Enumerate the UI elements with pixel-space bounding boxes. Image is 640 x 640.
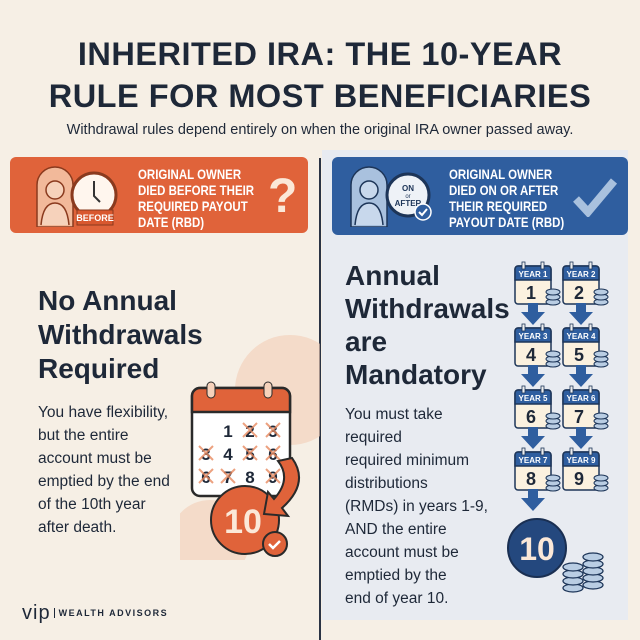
header text: ORIGINAL OWNER (449, 166, 552, 182)
illustration: calendar with 10: 7 (223, 468, 233, 487)
header text: PAYOUT DATE (RBD) (449, 214, 564, 230)
left body: account must be (38, 450, 152, 467)
illustration: yearly calendars: 10 (519, 531, 555, 567)
right body (345, 406, 488, 607)
illustration: yearly calendars: 7 (574, 407, 584, 427)
illustration: yearly calendars: YEAR 5 (519, 394, 548, 403)
illustration: yearly calendars: 5 (574, 345, 584, 365)
icon: person and clock (350, 166, 432, 227)
illustration: yearly calendars: YEAR 4 (567, 332, 596, 341)
illustration: yearly calendars: 6 (526, 407, 536, 427)
left heading: Required (38, 353, 159, 384)
title (49, 36, 591, 114)
icon: person and clock (36, 166, 118, 227)
right heading: are (345, 326, 387, 357)
right heading: Withdrawals (345, 293, 510, 324)
illustration: yearly calendars: YEAR 3 (519, 332, 548, 341)
illustration: calendar with 10: 4 (223, 445, 233, 464)
left body: after death. (38, 519, 116, 536)
illustration: calendar with 10 (180, 335, 320, 560)
illustration: yearly calendars: 1 (526, 283, 536, 303)
left heading: Withdrawals (38, 319, 203, 350)
footer logo: vip WEALTH ADVISORS (22, 602, 168, 624)
right body: AND the entire (345, 521, 447, 538)
left body: You have flexibility, (38, 404, 168, 421)
illustration: yearly calendars: YEAR 9 (567, 456, 596, 465)
illustration: calendar with 10: 6 (201, 468, 211, 487)
header text: DIED BEFORE THEIR (138, 182, 254, 198)
header text: REQUIRED PAYOUT (138, 198, 248, 214)
right body: (RMDs) in years 1-9, (345, 498, 488, 515)
right heading: Mandatory (345, 359, 487, 390)
illustration: yearly calendars: 4 (526, 345, 536, 365)
left heading: No Annual (38, 285, 177, 316)
illustration: yearly calendars: 8 (526, 469, 536, 489)
illustration: calendar with 10: 8 (245, 468, 255, 487)
header text (449, 166, 564, 230)
header text: DATE (RBD) (138, 214, 204, 230)
icon: person and clock: ON (402, 184, 414, 193)
right body: account must be (345, 544, 459, 561)
illustration: yearly calendars: YEAR 7 (519, 456, 548, 465)
illustration: yearly calendars (507, 262, 608, 593)
right body: distributions (345, 475, 428, 492)
illustration: calendar with 10: 1 (223, 422, 233, 441)
right heading: Annual (345, 260, 440, 291)
illustration: calendar with 10: 10 (224, 503, 262, 541)
header text (138, 166, 254, 230)
title: INHERITED IRA: THE 10-YEAR (78, 36, 562, 72)
left heading (38, 285, 203, 384)
right body: emptied by the (345, 567, 447, 584)
illustration: calendar with 10: 6 (268, 445, 278, 464)
illustration: calendar with 10: 3 (268, 422, 278, 441)
illustration: calendar with 10: 3 (201, 445, 211, 464)
icon: person and clock: AFTER (395, 199, 422, 208)
icon: person and clock: BEFORE (76, 213, 114, 223)
title: RULE FOR MOST BENEFICIARIES (49, 78, 591, 114)
illustration: yearly calendars: YEAR 1 (519, 270, 548, 279)
left body (38, 404, 170, 536)
header text: DIED ON OR AFTER (449, 182, 558, 198)
right body: You must take (345, 406, 443, 423)
left body: emptied by the end (38, 473, 170, 490)
right body: end of year 10. (345, 590, 448, 607)
icon: check mark (573, 178, 617, 217)
right panel background (322, 150, 628, 620)
subtitle: Withdrawal rules depend entirely on when the original IRA owner passed away. (67, 122, 573, 138)
header text: ORIGINAL OWNER (138, 166, 241, 182)
illustration: calendar with 10: 2 (245, 422, 255, 441)
illustration: yearly calendars: YEAR 2 (567, 270, 596, 279)
right heading (345, 260, 510, 390)
panel header: before RBD (10, 157, 308, 233)
icon: question mark: ? (268, 170, 297, 223)
illustration: yearly calendars: YEAR 6 (567, 394, 596, 403)
header text: THEIR REQUIRED (449, 198, 547, 214)
right body: required (345, 429, 402, 446)
right body: required minimum (345, 452, 469, 469)
panel header: on or after RBD (332, 157, 628, 235)
icon: person and clock: or (405, 194, 411, 200)
illustration: yearly calendars: 9 (574, 469, 584, 489)
left body: but the entire (38, 427, 128, 444)
illustration: calendar with 10: 5 (245, 445, 255, 464)
left body: of the 10th year (38, 496, 146, 513)
illustration: calendar with 10: 9 (268, 468, 278, 487)
illustration: yearly calendars: 2 (574, 283, 584, 303)
